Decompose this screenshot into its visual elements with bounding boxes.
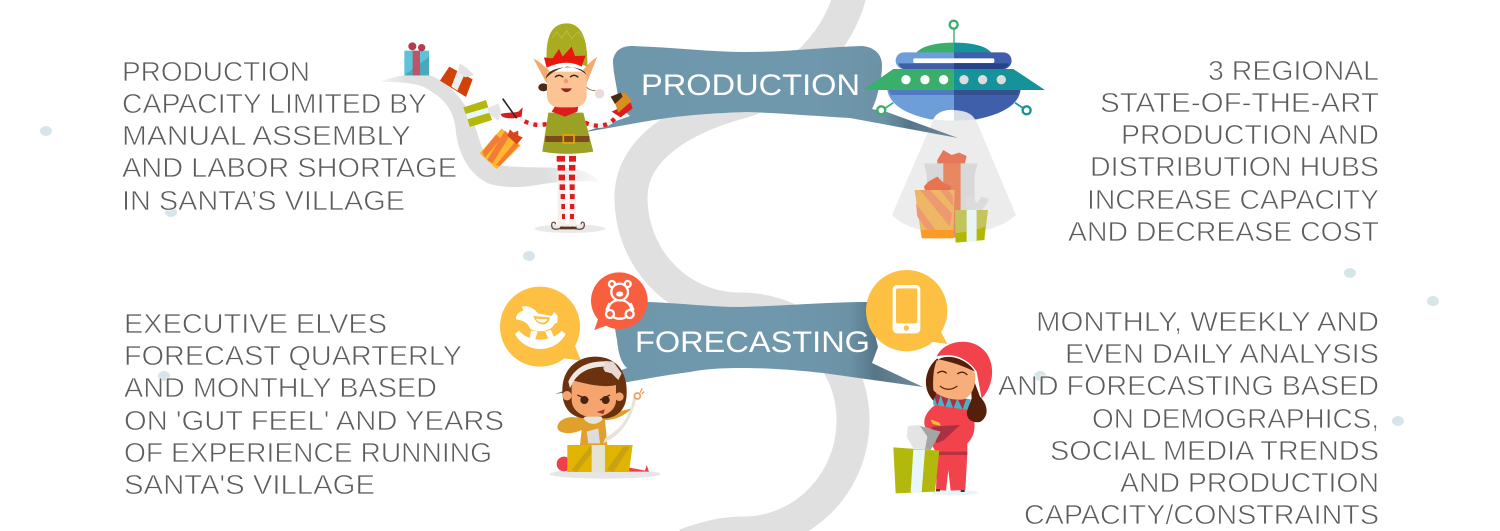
banner: production [585, 46, 958, 138]
text: production today: MANUAL ASSEMBLY [122, 120, 411, 151]
icon: red gift [440, 63, 474, 97]
text: forecasting future: CAPACITY/CONSTRAINTS [1024, 499, 1379, 530]
text: production future: INCREASE CAPACITY [1087, 184, 1379, 215]
elf arms [520, 118, 615, 126]
ufo tractor beam [892, 118, 1016, 234]
banner label: production: PRODUCTION [641, 69, 860, 102]
text: forecasting future: EVEN DAILY ANALYSIS [1065, 338, 1379, 369]
text: forecasting today: SANTA'S VILLAGE [124, 469, 375, 500]
icon: teal gift [404, 42, 429, 75]
gift stack under ufo [915, 150, 989, 243]
girl with yellow gift [549, 357, 661, 479]
text: production today: IN SANTA’S VILLAGE [122, 185, 405, 216]
girl gift [893, 447, 939, 493]
speech bubble: rocking horse [500, 287, 581, 367]
ufo [863, 21, 1045, 121]
banner label: forecasting: FORECASTING [635, 326, 870, 359]
gift conveyor road [380, 74, 600, 187]
icon: phone [893, 285, 920, 333]
text: forecasting today: ON 'GUT FEEL' AND YEARS [124, 405, 504, 436]
text: forecasting today: FORECAST QUARTERLY [124, 340, 462, 371]
text: forecasting today: AND MONTHLY BASED [124, 372, 437, 403]
ufo antennas [877, 21, 1031, 114]
girl hair [926, 358, 987, 422]
text: production today: AND LABOR SHORTAGE [122, 152, 457, 183]
striped gift [915, 190, 955, 238]
grey gift [924, 163, 978, 233]
girl body [924, 405, 975, 453]
snow dots [40, 126, 1439, 426]
banner: forecasting [555, 302, 923, 394]
text: production today: CAPACITY LIMITED BY [122, 88, 427, 119]
text: production future [1068, 55, 1379, 247]
girl legs [936, 453, 967, 491]
elf character [501, 23, 633, 233]
girl face [933, 359, 975, 400]
elf tunic [542, 113, 593, 154]
girl arms and ribbon [557, 403, 637, 445]
speech bubble: phone [866, 270, 947, 351]
elf head [533, 58, 550, 83]
text: forecasting future [998, 306, 1379, 530]
girl scarf [933, 393, 971, 410]
text: forecasting future: SOCIAL MEDIA TRENDS [1050, 435, 1379, 466]
text: production future: AND DECREASE COST [1068, 216, 1379, 247]
girl head [562, 357, 627, 418]
elf hands and tools [501, 107, 523, 118]
text: forecasting today: OF EXPERIENCE RUNNING [124, 437, 492, 468]
text: forecasting future: ON DEMOGRAPHICS, [1092, 403, 1379, 434]
winding road [631, 0, 853, 531]
icon: green gift [463, 100, 501, 127]
green gift [955, 210, 988, 243]
elf legs [552, 152, 584, 229]
icon: teddy bear [606, 281, 634, 319]
girl headband [568, 361, 608, 388]
text: production future: PRODUCTION AND [1121, 119, 1379, 150]
text: production future: STATE-OF-THE-ART [1100, 87, 1379, 118]
text: forecasting future: MONTHLY, WEEKLY AND [1036, 306, 1379, 337]
girl in red snowsuit with green gift [893, 342, 992, 495]
icon: striped gift [480, 128, 523, 169]
text: production future: 3 REGIONAL [1208, 55, 1379, 86]
text: forecasting today: EXECUTIVE ELVES [124, 308, 387, 339]
text: forecasting future: AND FORECASTING BASED [998, 370, 1379, 401]
text: production future: DISTRIBUTION HUBS [1090, 151, 1379, 182]
text: production today [122, 56, 457, 216]
icon: rocking horse [515, 306, 566, 349]
elf hat [547, 23, 587, 67]
text: production today: PRODUCTION [122, 56, 310, 87]
speech bubble: teddy bear [591, 272, 648, 330]
text: forecasting today [124, 308, 504, 500]
text: forecasting future: AND PRODUCTION [1120, 467, 1379, 498]
girl gift box [567, 445, 633, 472]
